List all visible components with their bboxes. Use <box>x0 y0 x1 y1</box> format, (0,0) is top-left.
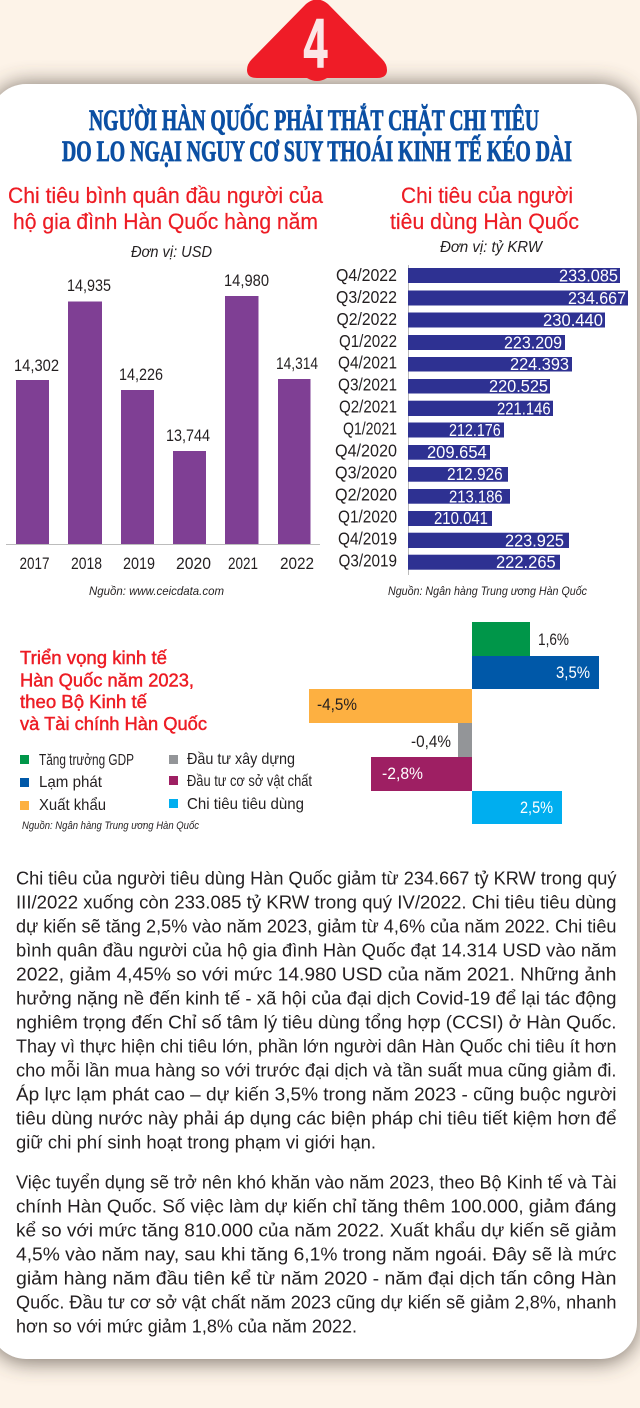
diverging bar chart: -2,8% <box>382 765 423 783</box>
bar chart: annual spending: 2019 <box>123 555 155 573</box>
title <box>62 103 572 168</box>
horizontal bar chart: quarterly spending: Q3/2020 <box>335 463 397 483</box>
horizontal bar chart: quarterly spending: 212.926 <box>447 464 503 484</box>
body text: second paragraph: Việc tuyển dụng sẽ trở nên khó khăn vào năm 2023, theo Bộ Kinh tế và Tài <box>16 1172 616 1192</box>
body text: first paragraph: Thay vì thực hiện chi tiêu lớn, phần lớn người dân Hàn Quốc chi tiêu ít hơn <box>16 1036 616 1056</box>
horizontal bar chart: quarterly spending <box>335 265 628 575</box>
body text: first paragraph: Áp lực lạm phát cao – dự kiến 3,5% trong năm 2023 - cũng buộc người <box>16 1084 617 1104</box>
bar chart: annual spending: 14,980 <box>224 272 269 290</box>
bar chart: annual spending: 14,302 <box>14 357 59 375</box>
body text: first paragraph: nghiêm trọng đến Chỉ số tâm lý tiêu dùng tổng hợp (CCSI) ở Hàn Quốc. <box>16 1012 616 1032</box>
body text: first paragraph: hưởng nặng nề đến kinh tế - xã hội của đại dịch Covid-19 để lại tác động <box>16 988 616 1008</box>
panel: annual household spending per capita <box>6 183 324 598</box>
horizontal bar chart: quarterly spending: 223.925 <box>505 530 564 550</box>
bar chart: annual spending: 13,744 <box>166 427 210 445</box>
bar chart: annual spending: 14,935 <box>67 277 111 295</box>
heading: annual spending: hộ gia đình Hàn Quốc hàng năm <box>13 209 318 234</box>
body text: second paragraph: chính Hàn Quốc. Số việc làm dự kiến chỉ tăng thêm 100.000, giảm đáng <box>16 1196 616 1216</box>
body text: first paragraph: tiêu dùng nước này phải áp dụng các biện pháp chi tiêu tiết kiệm hơn để <box>16 1108 616 1128</box>
heading: consumer spending: Đơn vị: tỷ KRW <box>440 239 543 256</box>
legend: Xuất khẩu <box>39 796 106 814</box>
body text: first paragraph: giữ chi phí sinh hoạt trong phạm vi giới hạn. <box>16 1132 376 1152</box>
bar chart: annual spending: 2020 <box>176 555 211 573</box>
heading: outlook: Triển vọng kinh tế <box>20 648 167 668</box>
horizontal bar chart: quarterly spending: 213.186 <box>449 486 503 506</box>
body text: first paragraph <box>16 868 617 1152</box>
heading: consumer spending <box>390 183 579 256</box>
horizontal bar chart: quarterly spending: Q1/2022 <box>339 331 397 351</box>
horizontal bar chart: quarterly spending: 210.041 <box>434 508 488 528</box>
number badge <box>247 0 387 82</box>
diverging bar chart: 2,5% <box>520 799 553 817</box>
horizontal bar chart: quarterly spending: Q4/2020 <box>335 441 397 461</box>
body text: second paragraph <box>16 1172 616 1336</box>
body text: first paragraph: Chi tiêu của người tiêu dùng Hàn Quốc giảm từ 234.667 tỷ KRW trong quý <box>16 868 617 888</box>
bar chart: annual spending: 2022 <box>280 555 314 573</box>
heading: outlook <box>20 648 207 734</box>
body text: second paragraph: giảm hàng năm đầu tiên kể từ năm 2020 - năm đại dịch tấn công Hàn <box>16 1268 616 1288</box>
heading: outlook: và Tài chính Hàn Quốc <box>20 714 207 734</box>
legend: Lạm phát <box>39 774 103 791</box>
horizontal bar chart: quarterly spending: Q4/2021 <box>338 352 397 372</box>
horizontal bar chart: quarterly spending: 234.667 <box>568 288 626 308</box>
bar chart: annual spending: 14,226 <box>119 366 163 384</box>
horizontal bar chart: quarterly spending: 212.176 <box>449 420 501 440</box>
horizontal bar chart: quarterly spending: Q3/2019 <box>338 551 397 571</box>
body text: first paragraph: III/2022 xuống còn 233.085 tỷ KRW trong quý IV/2022. Chi tiêu tiêu dùng <box>16 892 617 912</box>
body text: second paragraph: Quốc. Đầu tư cơ sở vật chất năm 2023 cũng dự kiến sẽ giảm 2,8%, nhanh <box>16 1292 616 1312</box>
bar chart: annual spending: 2017 <box>20 555 50 573</box>
legend: Đầu tư xây dựng <box>187 751 295 768</box>
diverging bar chart <box>309 622 599 824</box>
horizontal bar chart: quarterly spending: Q4/2019 <box>338 529 397 549</box>
legend: Đầu tư cơ sở vật chất <box>187 773 312 790</box>
panel: economic outlook 2023 <box>20 622 599 832</box>
horizontal bar chart: quarterly spending: 230.440 <box>543 310 603 330</box>
bar chart: annual spending: 2018 <box>71 555 102 573</box>
horizontal bar chart: quarterly spending: 220.525 <box>489 376 548 396</box>
diverging bar chart: 3,5% <box>556 664 590 682</box>
heading: annual spending <box>8 183 324 261</box>
diverging bar chart: -0,4% <box>411 733 451 751</box>
horizontal bar chart: quarterly spending: Q3/2022 <box>336 287 397 307</box>
legend: Chi tiêu tiêu dùng <box>187 796 304 813</box>
horizontal bar chart: quarterly spending: 223.209 <box>504 332 562 352</box>
legend: Tăng trưởng GDP <box>39 752 134 769</box>
legend <box>20 751 312 814</box>
horizontal bar chart: quarterly spending: Q4/2022 <box>336 265 397 285</box>
horizontal bar chart: quarterly spending: Q1/2021 <box>343 419 397 439</box>
horizontal bar chart: quarterly spending: Q1/2020 <box>338 507 397 527</box>
body text: first paragraph: 2022, giảm 4,45% so với mức 14.980 USD của năm 2021. Những ảnh <box>16 964 616 984</box>
horizontal bar chart: quarterly spending: 224.393 <box>510 354 569 374</box>
diverging bar chart: 1,6% <box>538 631 569 649</box>
horizontal bar chart: quarterly spending: Q2/2021 <box>339 397 397 417</box>
horizontal bar chart: quarterly spending: 222.265 <box>496 552 556 572</box>
number badge: 4 <box>304 4 328 82</box>
horizontal bar chart: quarterly spending: 233.085 <box>559 266 618 286</box>
source: central bank: Nguồn: Ngân hàng Trung ương Hàn Quốc <box>388 584 587 598</box>
heading: outlook: Hàn Quốc năm 2023, <box>20 670 194 690</box>
bar chart: annual spending <box>6 272 320 573</box>
body text: first paragraph: bình quân đầu người của hộ gia đình Hàn Quốc đạt 14.314 USD vào năm <box>16 940 616 960</box>
source: outlook: Nguồn: Ngân hàng Trung ương Hàn Quốc <box>22 820 199 832</box>
horizontal bar chart: quarterly spending: 221.146 <box>497 398 551 418</box>
heading: annual spending: Chi tiêu bình quân đầu người của <box>8 183 324 208</box>
body text: second paragraph: kể so với mức tăng 810.000 của năm 2022. Xuất khẩu dự kiến sẽ giảm <box>16 1220 616 1240</box>
diverging bar chart: -4,5% <box>317 696 357 714</box>
body text: first paragraph: cho mỗi lần mua hàng so với trước đại dịch và tần suất mua cũng giảm đi. <box>16 1060 616 1080</box>
bar chart: annual spending: 2021 <box>228 555 258 573</box>
body text: second paragraph: hơn so với mức giảm 1,8% của năm 2022. <box>16 1316 357 1336</box>
heading: outlook: theo Bộ Kinh tế <box>20 692 147 712</box>
horizontal bar chart: quarterly spending: Q3/2021 <box>338 374 397 394</box>
panel: consumer spending by quarter <box>335 183 628 598</box>
heading: consumer spending: tiêu dùng Hàn Quốc <box>390 209 579 234</box>
heading: annual spending: Đơn vị: USD <box>131 244 212 261</box>
heading: consumer spending: Chi tiêu của người <box>401 183 573 208</box>
horizontal bar chart: quarterly spending: 209.654 <box>427 442 487 462</box>
horizontal bar chart: quarterly spending: Q2/2020 <box>335 484 397 504</box>
horizontal bar chart: quarterly spending: Q2/2022 <box>336 309 397 329</box>
source: ceicdata: Nguồn: www.ceicdata.com <box>89 584 224 598</box>
body text: first paragraph: dự kiến sẽ tăng 2,5% vào năm 2023, giảm từ 4,6% của năm 2022. Chi tiêu <box>16 916 616 936</box>
bar chart: annual spending: 14,314 <box>276 355 318 373</box>
body text: second paragraph: 4,5% vào năm nay, sau khi tăng 6,1% trong năm ngoái. Đây sẽ là mức <box>16 1244 616 1264</box>
